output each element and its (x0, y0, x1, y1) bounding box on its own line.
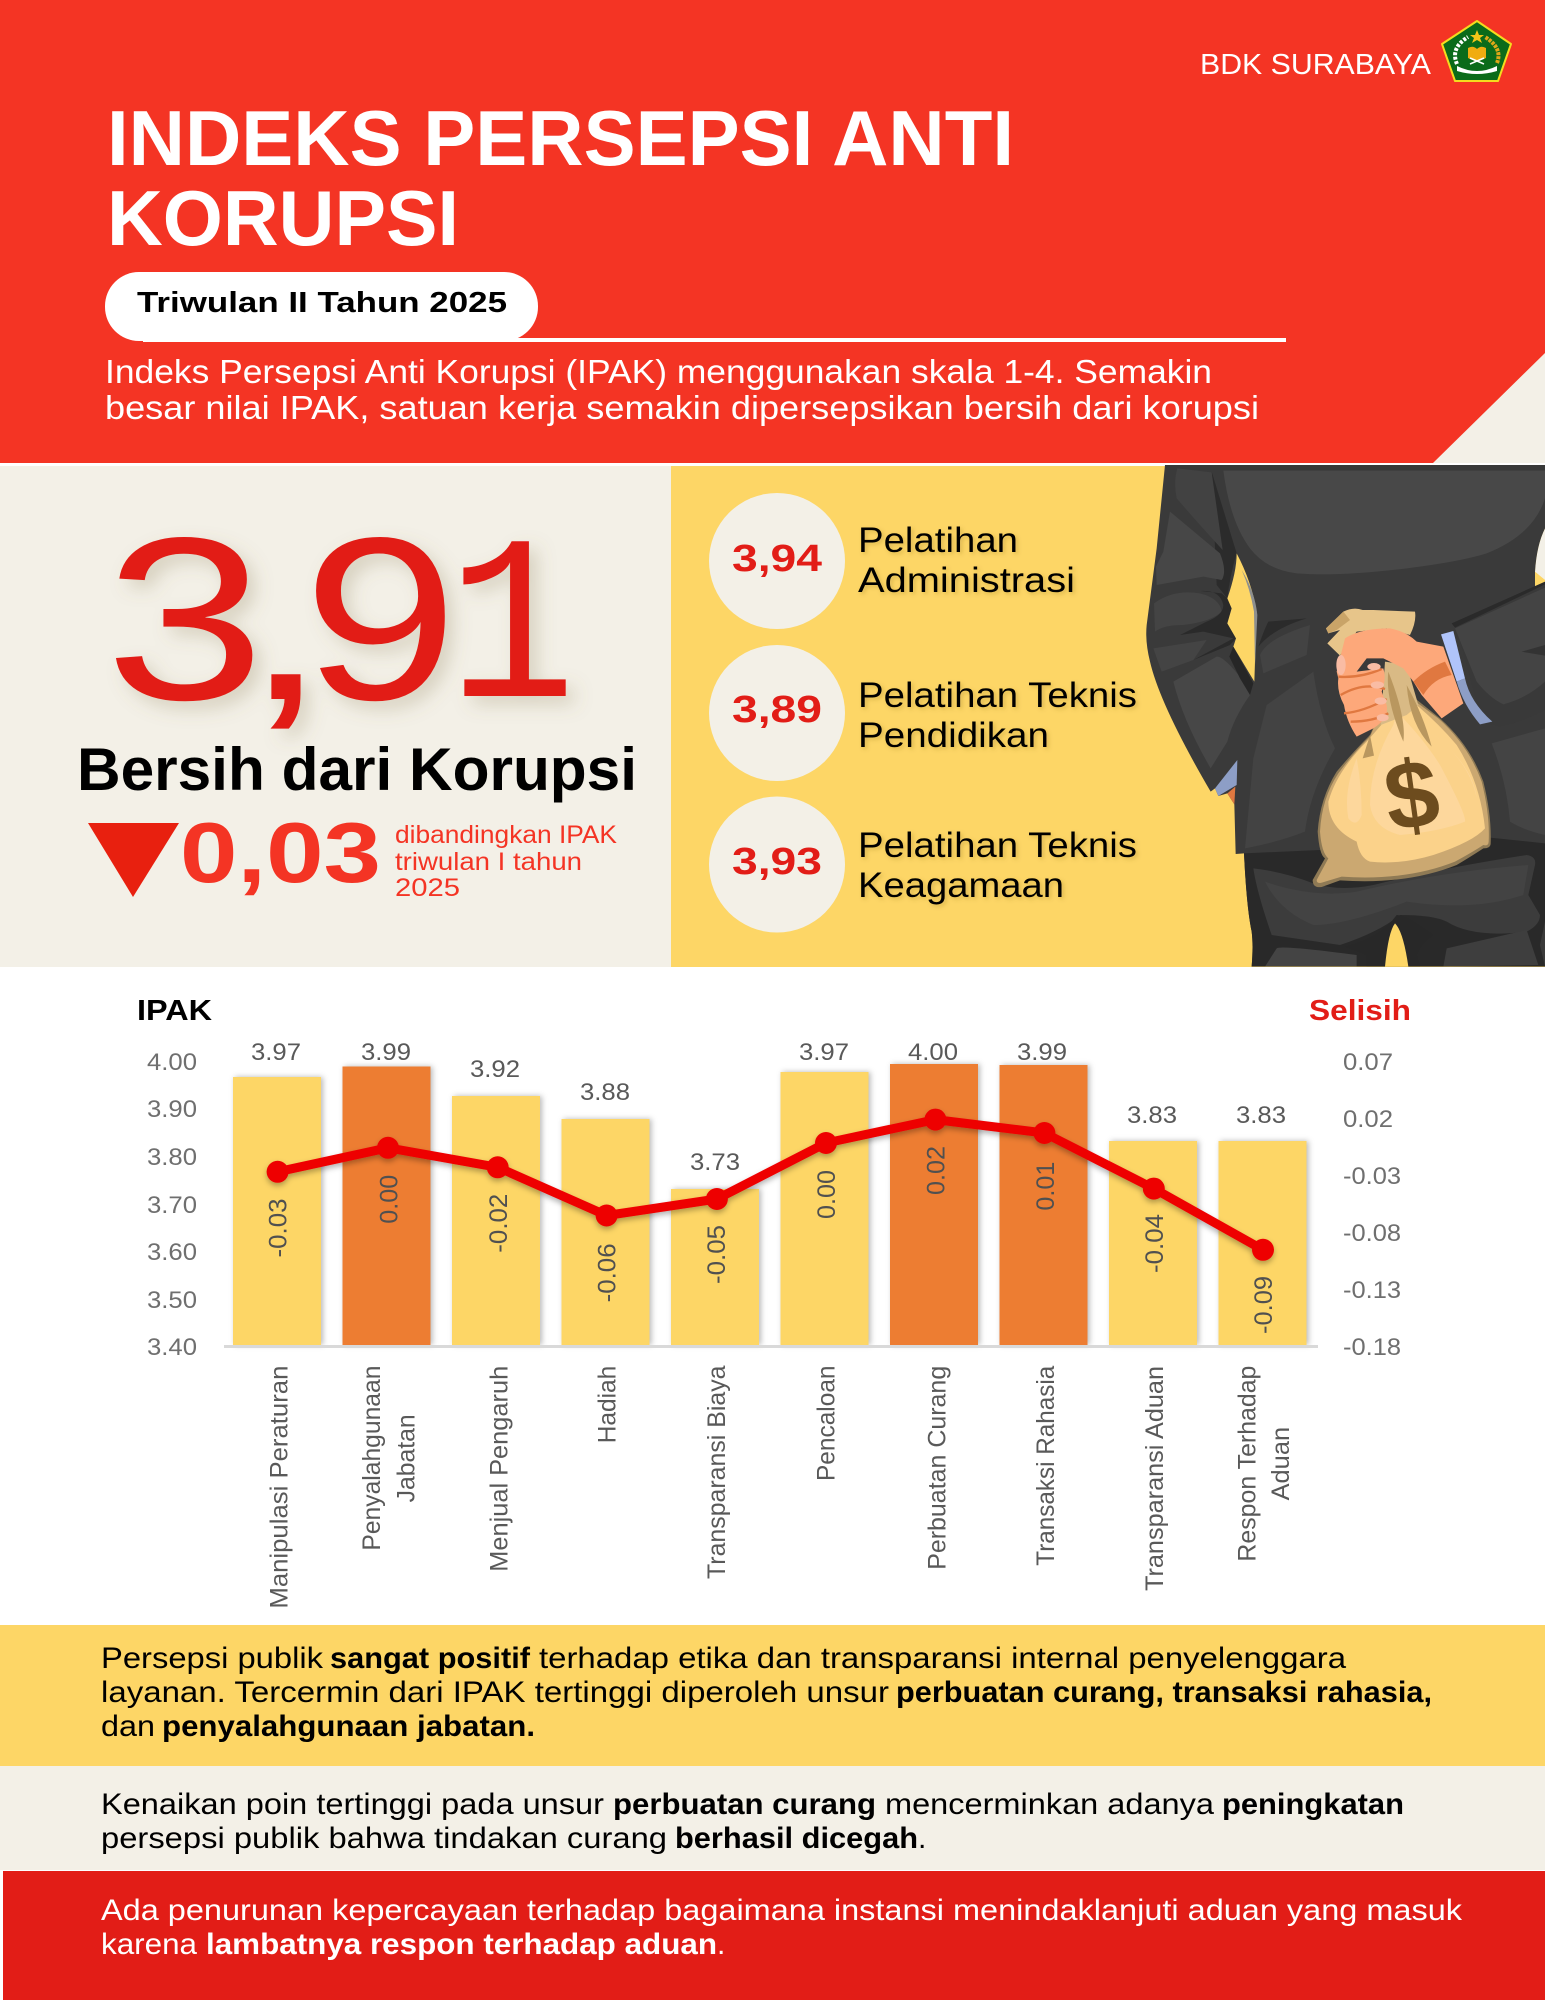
panel: positive perception note: penyalahgunaan jabatan. (162, 1710, 535, 1743)
difference labels: -0.06 (594, 1243, 622, 1302)
intro text: besar nilai IPAK, satuan kerja semakin dipersepsikan bersih dari korupsi (105, 389, 1259, 426)
brand label: BDK SURABAYA (1200, 49, 1432, 81)
right axis labels (1343, 1049, 1401, 1361)
panel: decline note: . (717, 1928, 725, 1961)
category labels (266, 1365, 1295, 1609)
difference labels: -0.02 (485, 1194, 513, 1253)
panel: positive perception note: Persepsi publik (101, 1642, 324, 1675)
verdict heading: Bersih dari Korupsi (77, 736, 637, 803)
pill: period (105, 272, 538, 341)
bar value labels: 3.99 (361, 1039, 411, 1066)
intro text: Indeks Persepsi Anti Korupsi (IPAK) menggunakan skala 1-4. Semakin (105, 353, 1212, 390)
score: keagamaan: 3,93 (732, 841, 822, 883)
bar value labels: 3.97 (251, 1039, 301, 1066)
difference labels: 0.00 (375, 1175, 403, 1224)
panel: decline note: lambatnya respon terhadap aduan (206, 1928, 717, 1961)
bar value labels (251, 1039, 1286, 1176)
category labels: Respon Terhadap (1234, 1366, 1262, 1562)
illustration: businessman with money bag (1146, 465, 1545, 967)
left axis labels: 3.50 (147, 1287, 197, 1314)
change note: triwulan I tahun (395, 848, 582, 876)
panel: decline note (3, 1871, 1545, 2000)
category labels: Penyalahgunaan (358, 1366, 386, 1551)
left axis labels: 3.40 (147, 1334, 197, 1361)
icon: dollar sign: $ (1378, 739, 1446, 852)
right axis title: Selisih (1309, 995, 1411, 1027)
right axis labels: 0.07 (1343, 1049, 1393, 1076)
icon: down triangle (88, 823, 179, 897)
left axis title: IPAK (137, 995, 212, 1027)
score: pendidikan: Pendidikan (858, 716, 1049, 755)
panel: decline note: Ada penurunan kepercayaan terhadap bagaimana instansi menindaklanjuti aduan yang masuk (101, 1894, 1463, 1927)
panel: overall score (0, 466, 671, 967)
panel: highest increase note: peningkatan (1222, 1788, 1404, 1821)
right axis labels: 0.02 (1343, 1106, 1393, 1133)
subtitle rule (143, 338, 1286, 342)
score: pendidikan: Pelatihan Teknis (858, 676, 1137, 715)
left axis labels: 3.90 (147, 1096, 197, 1123)
left axis labels: 3.70 (147, 1192, 197, 1219)
difference labels: 0.01 (1032, 1162, 1060, 1211)
right axis labels: -0.08 (1343, 1220, 1401, 1247)
big number: 1 (448, 500, 576, 767)
difference labels: -0.05 (703, 1225, 731, 1284)
score: pendidikan (709, 645, 1137, 781)
panel: positive perception note: sangat positif (330, 1642, 531, 1675)
category labels: Aduan (1267, 1427, 1295, 1500)
panel: training scores (671, 465, 1545, 967)
panel: positive perception note: perbuatan curang, transaksi rahasia, (896, 1676, 1432, 1709)
bar value labels: 3.83 (1236, 1102, 1286, 1129)
big number (105, 490, 576, 767)
big number: 3 (105, 490, 265, 749)
panel: positive perception note: dan (101, 1710, 155, 1743)
panel: highest increase note: berhasil dicegah (675, 1822, 918, 1855)
difference labels: 0.02 (922, 1146, 950, 1195)
right axis labels: -0.18 (1343, 1334, 1401, 1361)
panel: bar and line chart (137, 995, 1411, 1609)
title: KORUPSI (107, 174, 459, 262)
baseline axis (224, 1345, 1318, 1348)
bar value labels: 3.73 (690, 1149, 740, 1176)
pill: period: Triwulan II Tahun 2025 (137, 287, 507, 319)
change note: dibandingkan IPAK (395, 821, 617, 849)
change note: 2025 (395, 874, 460, 902)
panel: highest increase note: persepsi publik bahwa tindakan curang (101, 1822, 667, 1855)
difference labels (265, 1146, 1278, 1334)
panel: positive perception note: terhadap etika dan transparansi internal penyelenggara (539, 1642, 1346, 1675)
left axis labels: 3.80 (147, 1144, 197, 1171)
panel: highest increase note (0, 1766, 1545, 1870)
title (107, 94, 1014, 262)
panel: decline note: karena (101, 1928, 197, 1961)
big number: 9 (303, 490, 458, 749)
category labels: Perbuatan Curang (923, 1366, 951, 1570)
bar value labels: 4.00 (908, 1039, 958, 1066)
panel: positive perception note: layanan. Tercermin dari IPAK tertinggi diperoleh unsur (101, 1676, 889, 1709)
bar value labels: 3.83 (1127, 1102, 1177, 1129)
score: administrasi (709, 493, 1075, 629)
title: INDEKS PERSEPSI ANTI (107, 94, 1014, 182)
score: pendidikan: 3,89 (732, 689, 822, 731)
difference labels: -0.09 (1250, 1276, 1278, 1334)
category labels: Transaksi Rahasia (1032, 1366, 1060, 1566)
panel: highest increase note: . (918, 1822, 926, 1855)
panel: highest increase note: mencerminkan adanya (885, 1788, 1214, 1821)
change value: 0,03 (180, 806, 381, 901)
difference line (267, 1109, 1274, 1261)
bars (233, 1064, 1306, 1345)
bar value labels: 3.92 (470, 1056, 520, 1083)
category labels: Transparansi Biaya (703, 1365, 731, 1579)
bar value labels: 3.97 (799, 1039, 849, 1066)
icon: ministry logo (1442, 21, 1511, 81)
category labels: Jabatan (393, 1414, 421, 1502)
left axis labels (147, 1049, 197, 1361)
difference labels: 0.00 (813, 1170, 841, 1219)
category labels: Hadiah (594, 1366, 622, 1443)
panel: positive perception note (0, 1625, 1545, 1766)
left axis labels: 3.60 (147, 1239, 197, 1266)
category labels: Pencaloan (813, 1366, 841, 1481)
change note (395, 821, 617, 902)
right axis labels: -0.13 (1343, 1277, 1401, 1304)
category labels: Menjual Pengaruh (486, 1366, 514, 1572)
bar value labels: 3.88 (580, 1079, 630, 1106)
intro text (105, 353, 1259, 426)
difference labels: -0.04 (1141, 1214, 1169, 1273)
left axis labels: 4.00 (147, 1049, 197, 1076)
score: administrasi: Administrasi (858, 561, 1075, 600)
score: keagamaan: Keagamaan (858, 866, 1064, 905)
score: keagamaan: Pelatihan Teknis (858, 826, 1137, 865)
score: keagamaan (709, 796, 1137, 932)
panel: header (0, 0, 1545, 463)
right axis labels: -0.03 (1343, 1163, 1401, 1190)
category labels: Transparansi Aduan (1141, 1366, 1169, 1591)
score: administrasi: Pelatihan (858, 521, 1018, 560)
big number: , (243, 490, 328, 749)
difference labels: -0.03 (265, 1198, 293, 1258)
bar value labels: 3.99 (1017, 1039, 1067, 1066)
score: administrasi: 3,94 (732, 538, 822, 580)
panel: highest increase note: Kenaikan poin tertinggi pada unsur (101, 1788, 604, 1821)
category labels: Manipulasi Peraturan (266, 1366, 294, 1609)
panel: highest increase note: perbuatan curang (613, 1788, 876, 1821)
